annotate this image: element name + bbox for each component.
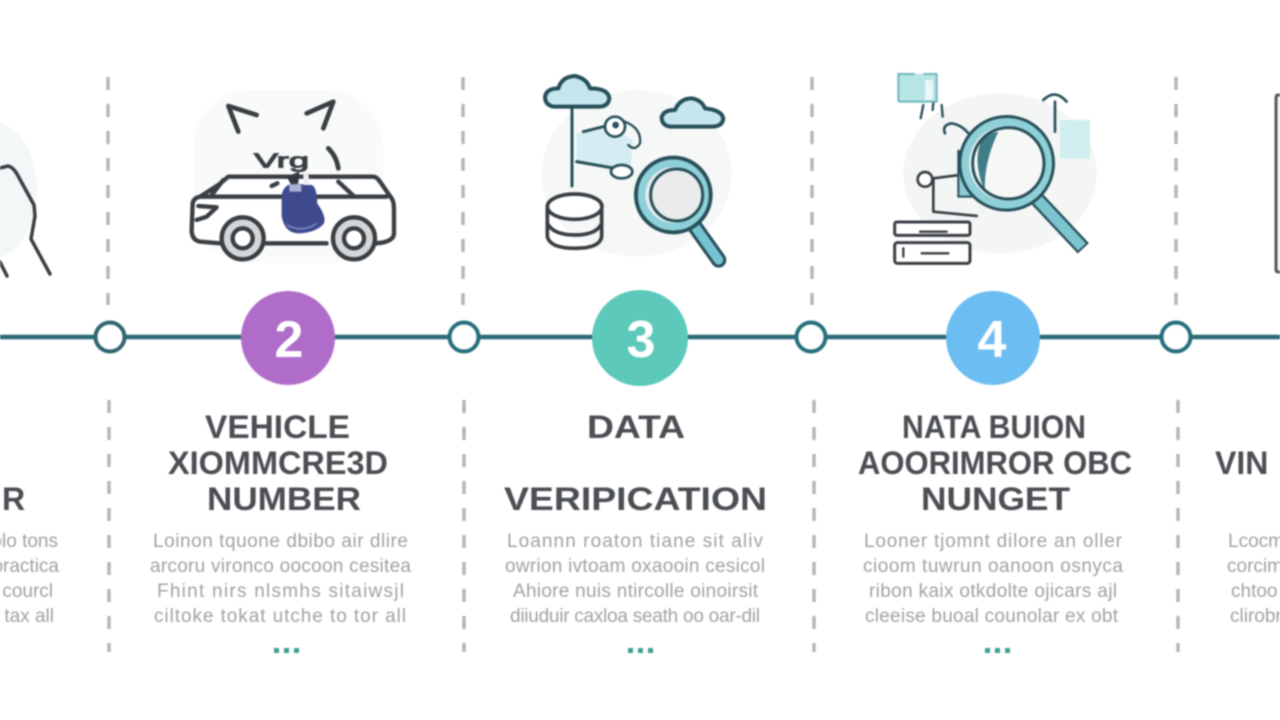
step 5 panel, cropped at right edge <box>1215 95 1280 627</box>
ellipsis dots <box>628 648 653 653</box>
heading: XIOMMCRE3D <box>168 445 388 481</box>
body text fragment <box>0 531 59 627</box>
body text: cioom tuwrun oanoon osnyca <box>863 556 1123 577</box>
icon: car with VIN tag: Vrg <box>254 149 309 172</box>
heading: VEHICLE <box>205 409 350 445</box>
heading <box>858 409 1132 517</box>
heading: DATA <box>587 409 685 445</box>
body text: Looner tjomnt dilore an oller <box>864 531 1123 552</box>
heading: AOORIMROR OBC <box>858 445 1132 481</box>
step number 2: 2 <box>275 311 303 369</box>
step 1 panel, cropped at left edge <box>0 122 59 627</box>
icon: magnifier over documents and servers <box>895 74 1097 263</box>
step 2 panel: vehicle identification number <box>150 90 411 653</box>
step number 4: 4 <box>978 311 1007 369</box>
heading <box>168 409 388 517</box>
heading: VERIPICATION <box>504 481 767 517</box>
step number 3 <box>592 290 688 386</box>
step 3 panel: data verification <box>504 76 767 653</box>
body text <box>863 531 1123 627</box>
ellipsis dots <box>985 648 1010 653</box>
step 4 panel <box>858 74 1132 653</box>
step number 2 <box>241 291 335 385</box>
heading fragment: VIN <box>1215 445 1268 481</box>
icon: car with VIN tag <box>192 90 394 263</box>
icon: hand outline <box>0 122 50 276</box>
body text: cleeise buoal counolar ex obt <box>865 606 1119 627</box>
heading fragment: R <box>2 481 25 517</box>
body text: Ahiore nuis ntircolle oinoirsit <box>513 581 759 602</box>
body text: Loinon tquone dbibo air dlire <box>153 531 408 552</box>
heading: NATA BUION <box>902 409 1086 445</box>
ellipsis dots <box>274 648 299 653</box>
body text: diiuduir caxloa seath oo oar-dil <box>510 606 760 627</box>
timeline axis with nodes <box>0 322 1280 352</box>
body text: ribon kaix otkdolte ojicars ajl <box>869 581 1117 602</box>
body text: ciltoke tokat utche to tor all <box>154 606 406 627</box>
icon: device edge <box>1276 95 1280 272</box>
body text fragment <box>1227 531 1280 627</box>
heading: NUMBER <box>207 481 361 517</box>
step number 3: 3 <box>627 311 655 369</box>
heading: NUNGET <box>921 481 1070 517</box>
body text fragment: courcl <box>2 581 53 602</box>
heading <box>504 409 767 517</box>
body text: owrion ivtoam oxaooin cesicol <box>505 556 765 577</box>
body text: Loannn roaton tiane sit aliv <box>507 531 764 552</box>
body text <box>150 531 411 627</box>
body text fragment: tax all <box>4 606 54 627</box>
icon: clouds, database and magnifier <box>542 76 732 260</box>
body text: arcoru vironco oocoon cesitea <box>150 556 411 577</box>
body text <box>505 531 765 627</box>
step number 4 <box>946 291 1040 385</box>
body text fragment: chtoo <box>1231 581 1277 602</box>
body text: Fhint nirs nlsmhs sitaiwsjl <box>157 581 404 602</box>
